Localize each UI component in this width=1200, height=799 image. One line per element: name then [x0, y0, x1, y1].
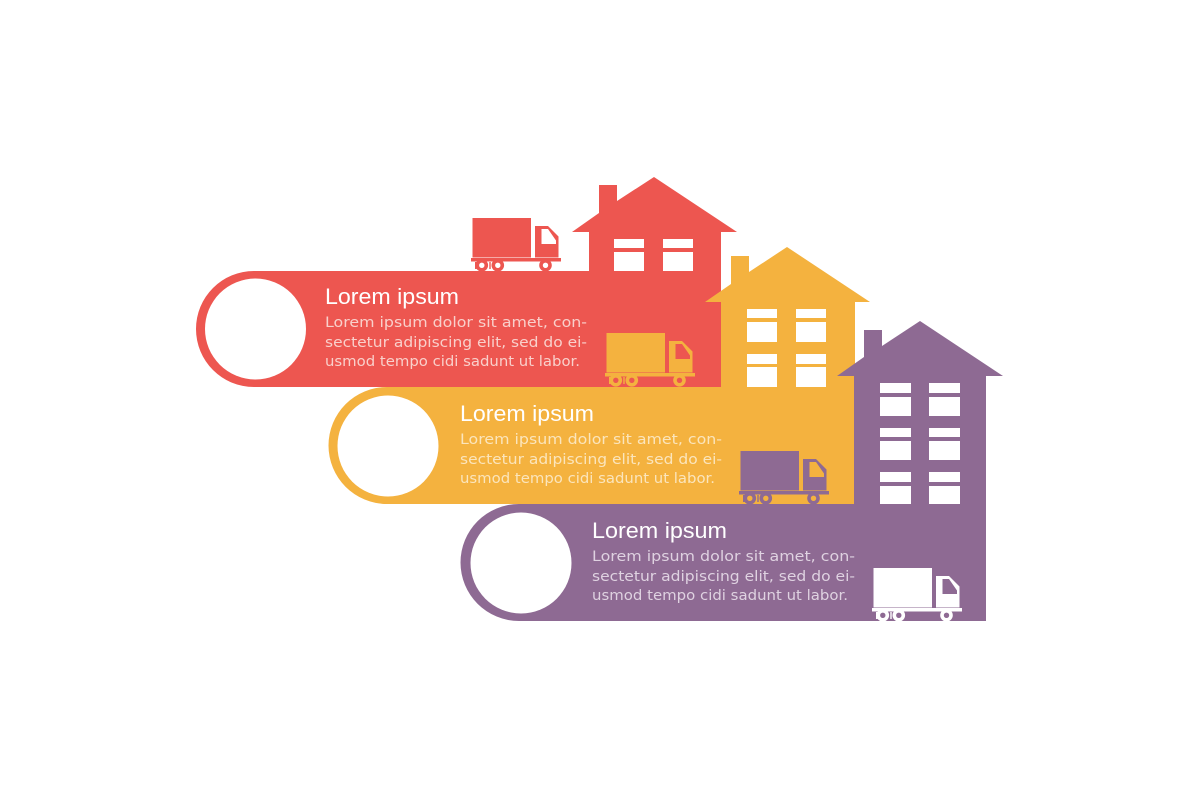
red circle placeholder	[205, 278, 306, 380]
purple circle placeholder	[470, 512, 572, 614]
yellow bar and house silhouette	[329, 247, 870, 504]
icon: yellow truck	[605, 333, 695, 385]
panel: purple step	[461, 321, 1003, 621]
icon: white truck	[872, 568, 962, 620]
purple body text	[592, 549, 855, 604]
icon: purple truck	[739, 451, 829, 503]
red body text: Lorem ipsum dolor sit amet, con-	[325, 315, 587, 331]
red bar and house silhouette	[196, 177, 737, 387]
yellow circle placeholder	[338, 396, 438, 496]
purple bar and house silhouette	[461, 321, 1003, 621]
yellow body text: sectetur adipiscing elit, sed do ei-	[460, 452, 722, 468]
purple heading: Lorem ipsum	[592, 518, 727, 543]
yellow body text: Lorem ipsum dolor sit amet, con-	[460, 432, 722, 448]
red house windows	[614, 239, 693, 271]
icon: red truck	[471, 218, 561, 270]
yellow heading: Lorem ipsum	[460, 401, 594, 426]
yellow body text	[460, 432, 722, 487]
red heading: Lorem ipsum	[325, 284, 459, 309]
yellow house windows	[747, 309, 826, 387]
panel: yellow step	[329, 247, 870, 504]
purple house windows	[880, 383, 960, 504]
purple body text: Lorem ipsum dolor sit amet, con-	[592, 549, 855, 565]
red body text	[325, 315, 587, 370]
red body text: sectetur adipiscing elit, sed do ei-	[325, 335, 587, 351]
purple body text: sectetur adipiscing elit, sed do ei-	[592, 569, 855, 585]
panel: red step	[196, 177, 737, 387]
yellow body text: usmod tempo cidi sadunt ut labor.	[460, 471, 715, 487]
purple body text: usmod tempo cidi sadunt ut labor.	[592, 588, 848, 604]
red body text: usmod tempo cidi sadunt ut labor.	[325, 354, 580, 370]
